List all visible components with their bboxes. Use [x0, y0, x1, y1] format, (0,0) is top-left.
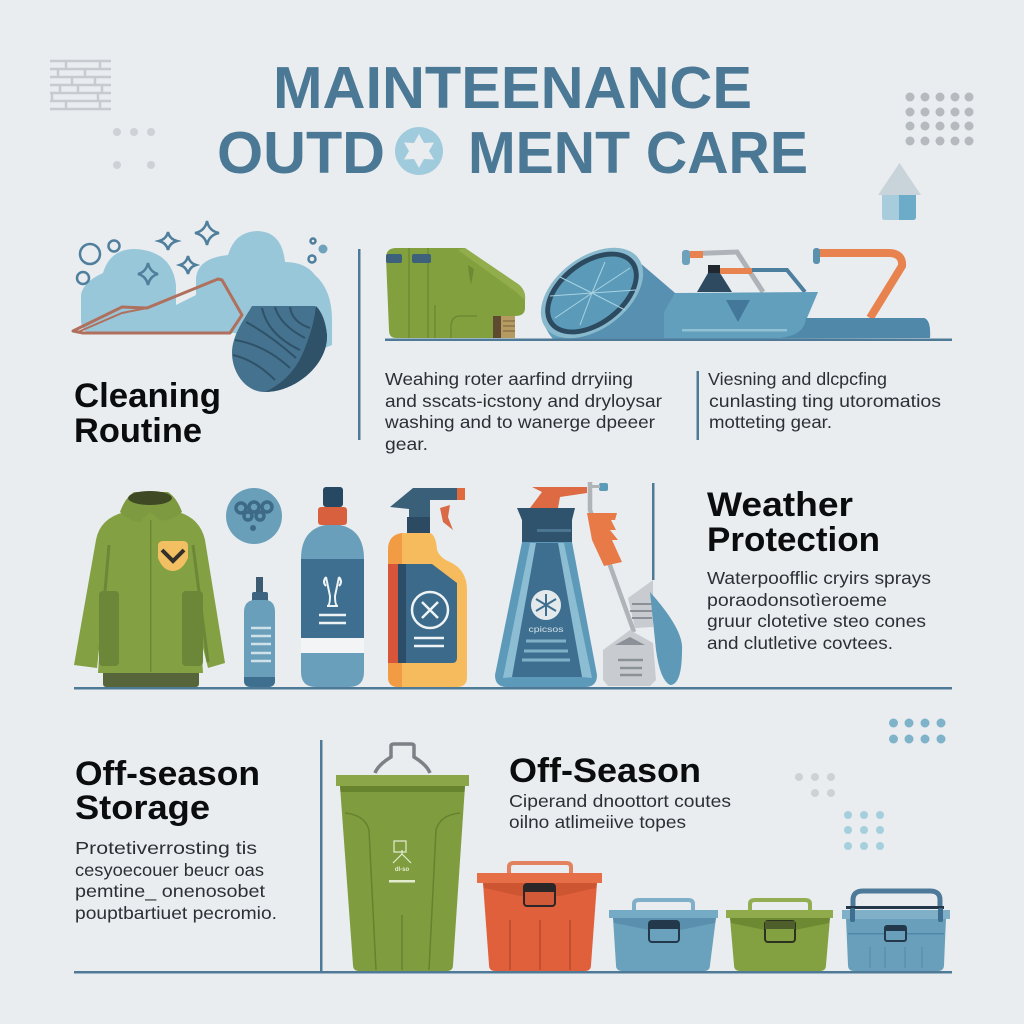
text block: viewing: Viesning and dlcpcfing [708, 369, 887, 389]
panel: cleaning routine [73, 221, 332, 450]
icon: large blue bottle [301, 487, 364, 687]
text block: weather protection [707, 568, 931, 653]
heading: off-season: Off-Season [509, 752, 701, 790]
icon: small house [878, 163, 921, 220]
heading: off-season storage: Off-season [75, 755, 260, 793]
icon: star badge in title [395, 127, 443, 175]
title [217, 55, 808, 186]
text block: washing: Weahing roter aarfind drryiing [385, 369, 633, 389]
text block: viewing: motteting gear. [709, 412, 832, 432]
text block: off-season storage: pouptbartiuet pecromio. [75, 903, 277, 923]
icon: yellow spray bottle [388, 488, 467, 687]
title: MENT CARE [468, 120, 808, 186]
decorative dots top left [113, 128, 155, 169]
title: MAINTEENANCE [273, 55, 752, 121]
icon: blue spray bottle [495, 487, 597, 687]
divider line [696, 371, 699, 440]
text block: washing: and sscats-icstony and dryloysar [385, 391, 662, 411]
baseline decorative line [385, 338, 952, 341]
icon: green gear case [386, 248, 525, 338]
heading: cleaning routine: Routine [74, 412, 202, 450]
text block: weather protection: poraodonsotìeroeme [707, 590, 887, 610]
icon: green storage bin: dl-so [395, 867, 409, 873]
heading: cleaning routine: Cleaning [74, 377, 221, 415]
icon: red storage box [477, 863, 602, 971]
text block: off-season storage [75, 838, 277, 923]
icon: blue storage box [609, 900, 718, 971]
divider line [358, 249, 360, 440]
heading: cleaning routine [74, 377, 221, 450]
decorative dots top right [906, 92, 974, 146]
divider line [320, 740, 322, 972]
baseline decorative line [74, 687, 952, 690]
text block: viewing [708, 369, 941, 432]
icon: blue washing machine with orange hose [524, 229, 930, 357]
text block: off-season: Ciperand dnoottort coutes [509, 791, 731, 811]
text block: weather protection: gruur clotetive steo cones [707, 611, 926, 631]
heading: weather protection: Protection [707, 521, 880, 559]
decorative brick pattern [50, 61, 111, 109]
icon: green storage box [726, 900, 833, 971]
title: OUTD [217, 120, 385, 186]
baseline decorative line [74, 971, 952, 974]
text block: washing: gear. [385, 434, 428, 454]
heading: off-season storage [75, 755, 260, 827]
text block: off-season [509, 791, 731, 832]
heading: weather protection [707, 486, 880, 559]
icon: green jacket [74, 491, 225, 687]
text block: off-season storage: pemtine_ onenosobet [75, 881, 265, 902]
text block: weather protection: Waterpoofflic cryirs sprays [707, 568, 931, 588]
text block: viewing: cunlasting ting utoromatios [709, 391, 941, 411]
icon: blue droplet badge [226, 488, 282, 544]
icon: brush and scraper [587, 482, 682, 686]
divider line [652, 483, 654, 580]
text block: washing [384, 369, 662, 454]
text block: washing: washing and to wanerge dpeeer [384, 412, 655, 432]
icon: blue handled cooler [842, 891, 950, 971]
icon: soap clouds and sparkles [73, 221, 332, 350]
decorative dots lower right [795, 718, 946, 850]
text block: off-season storage: cesyoecouer beucr oas [75, 860, 264, 880]
icon: green storage bin [336, 744, 469, 971]
text block: off-season: oilno atlimeiive topes [509, 812, 686, 832]
icon: dark cleaning pad [232, 306, 327, 392]
icon: blue spray bottle: cpicsos [528, 625, 564, 634]
heading: weather protection: Weather [707, 486, 853, 524]
text block: off-season storage: Protetiverrosting tis [75, 838, 257, 858]
icon: small spray bottle [244, 577, 275, 687]
heading: off-season storage: Storage [75, 789, 210, 827]
text block: weather protection: and clutletive covtees. [707, 633, 893, 653]
